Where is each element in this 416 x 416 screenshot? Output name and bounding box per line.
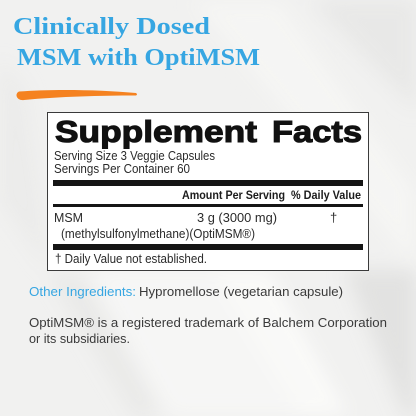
panel heading xyxy=(55,114,362,149)
table row: MSM: 3 g (3000 mg) xyxy=(197,210,277,225)
trademark note: OptiMSM® is a registered trademark of Balchem Corporation xyxy=(29,316,387,330)
other ingredients: Hypromellose (vegetarian capsule) xyxy=(139,285,343,299)
table row: MSM: (methylsulfonylmethane)(OptiMSM®) xyxy=(61,226,255,241)
trademark note xyxy=(29,316,387,346)
title: Clinically Dosed xyxy=(13,14,211,40)
table row: MSM: † xyxy=(330,210,337,225)
table row: MSM xyxy=(54,210,337,241)
table header: Amount Per Serving xyxy=(182,188,285,202)
serving information xyxy=(54,148,215,176)
panel: supplement facts xyxy=(48,112,368,270)
panel heading: Facts xyxy=(272,114,362,149)
other ingredients xyxy=(29,285,343,299)
title: MSM with OptiMSM xyxy=(17,45,260,71)
title xyxy=(13,14,260,71)
trademark note: or its subsidiaries. xyxy=(29,332,130,346)
orange brush stroke xyxy=(17,90,137,100)
other ingredients: Other Ingredients: xyxy=(29,285,136,299)
table row: MSM: MSM xyxy=(54,210,83,225)
serving information: Serving Size 3 Veggie Capsules xyxy=(54,148,215,163)
panel heading: Supplement xyxy=(55,114,257,149)
serving information: Servings Per Container 60 xyxy=(54,161,190,176)
footnote: † Daily Value not established. xyxy=(55,251,207,266)
table header: % Daily Value xyxy=(291,188,361,202)
table header xyxy=(182,188,361,202)
